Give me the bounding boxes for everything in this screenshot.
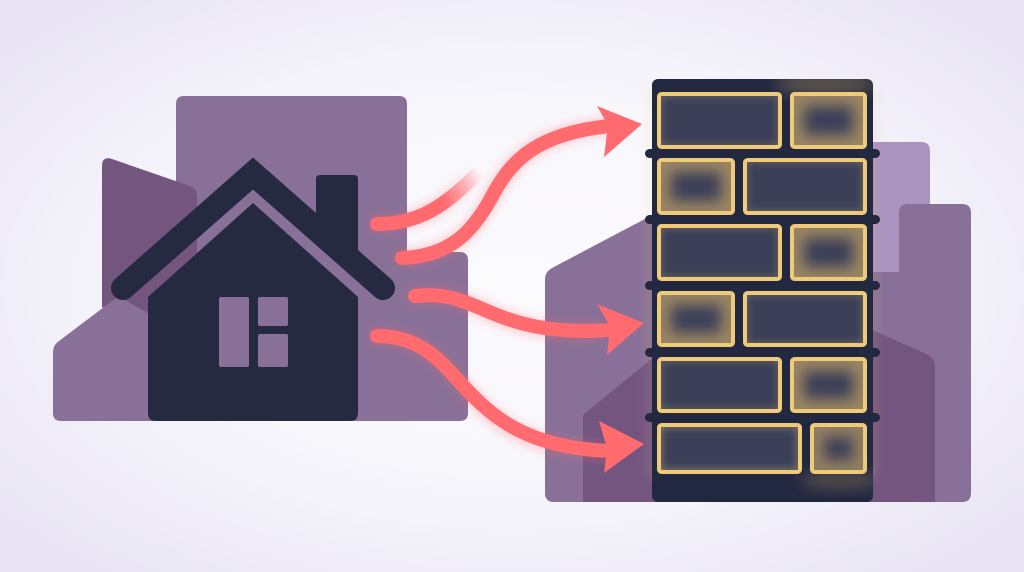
wall body <box>652 79 873 502</box>
panel: house backdrop shapes <box>53 96 468 421</box>
backdrop: dark angled block <box>102 158 197 330</box>
arrows: heat flow <box>377 106 644 473</box>
arrow: faded stream <box>377 175 476 224</box>
wall outer gold glow <box>650 92 874 474</box>
window <box>219 297 288 367</box>
arrow: to bottom of wall <box>377 336 644 473</box>
house body <box>148 203 358 421</box>
backdrop: dark inner house block <box>583 330 935 502</box>
backdrop: low left block <box>53 298 160 421</box>
wall corner glows <box>775 74 880 490</box>
icon: house <box>123 174 383 421</box>
brick inner glows <box>659 94 865 472</box>
chimney <box>316 175 358 266</box>
brick fills <box>659 94 865 472</box>
backdrop: main angled block <box>545 204 971 502</box>
arrow: to middle of wall <box>415 295 644 355</box>
wall <box>645 74 880 502</box>
arrow: to top of wall <box>402 106 642 258</box>
mortar bars <box>645 149 880 422</box>
roof <box>123 174 383 288</box>
backdrop: light rear block <box>860 142 930 285</box>
panel: wall backdrop shapes <box>545 142 971 502</box>
arrow glows <box>377 126 610 451</box>
brick outlines <box>659 94 865 472</box>
backdrop: tall block with right shoulder <box>176 96 468 421</box>
